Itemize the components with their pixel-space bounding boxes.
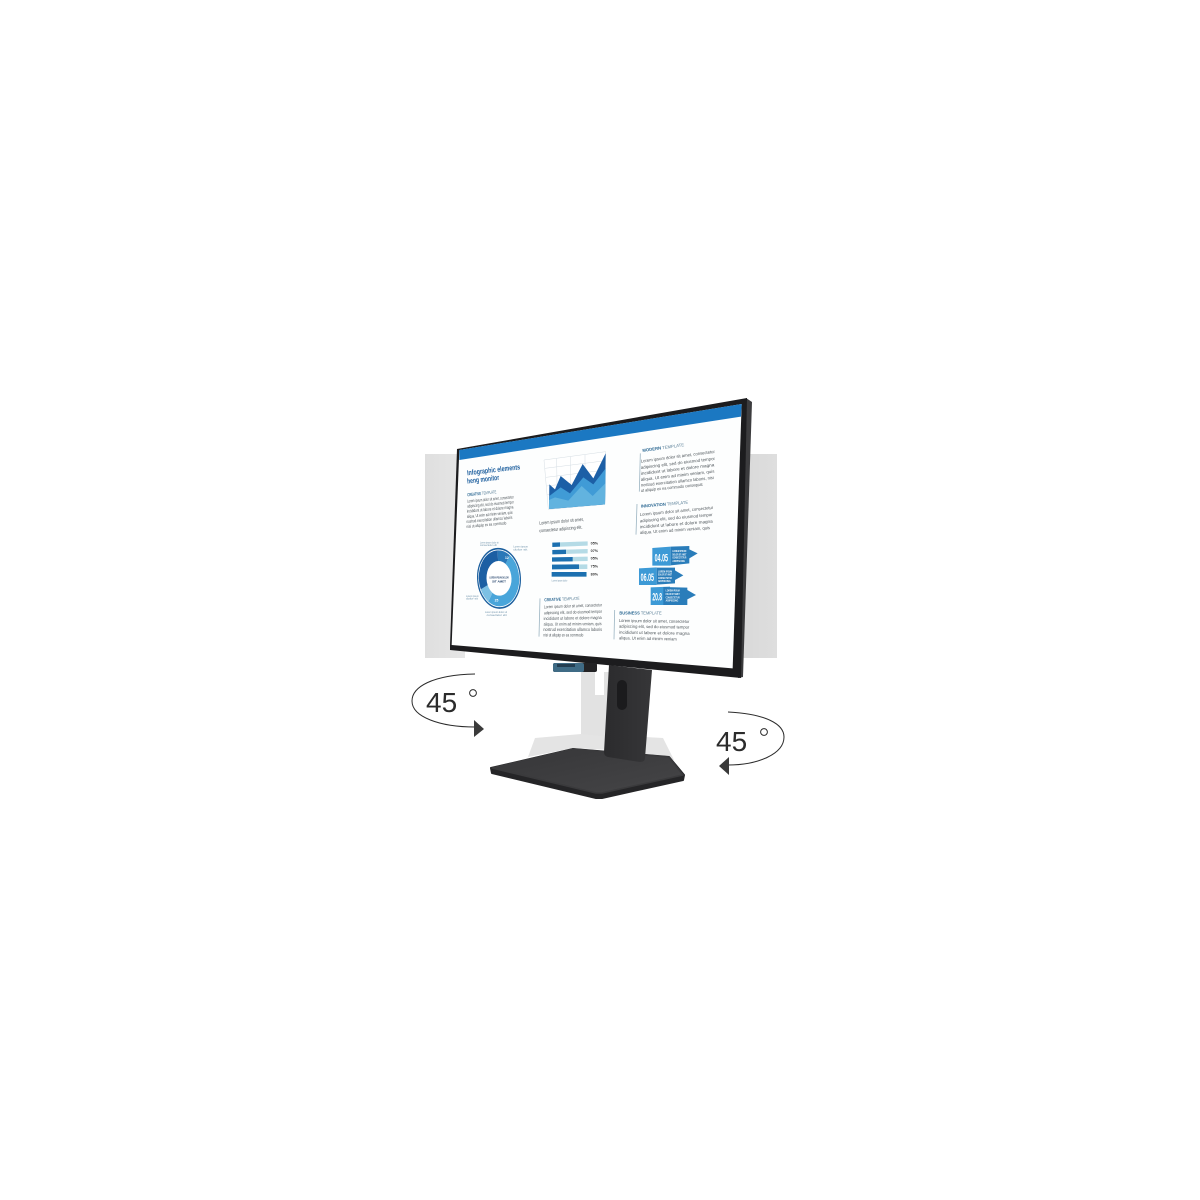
ribbon callout 20.8 — [651, 587, 696, 605]
donut callout labels: consectetur elit — [480, 543, 497, 547]
creative template text, left: aliqua. Ut enim ad minim veniam, quis — [467, 510, 513, 519]
monitor bezel — [450, 398, 747, 678]
ribbon callout 04.05: CONSECTETUR — [672, 558, 687, 560]
business template text — [614, 610, 690, 642]
creative template text, left: CREATIVE TEMPLATE — [467, 489, 497, 497]
creative template text, left: adipiscing elit, sed do eiusmod tempor — [467, 499, 514, 509]
donut chart: 25 — [495, 598, 499, 602]
screen header bar — [459, 404, 742, 460]
modern template text: MODERN TEMPLATE — [642, 442, 684, 453]
creative template text, left: nostrud exercitation ullamco laboris — [466, 515, 513, 524]
ribbon callout 04.05: 04.05 — [655, 552, 668, 564]
horizontal bar chart: 05% — [591, 557, 599, 561]
creative template text, centre: incididunt ut labore et dolore magna — [544, 615, 602, 621]
creative template text, left: incididunt ut labore et dolore magna — [467, 504, 514, 514]
donut callout labels: Lorem ipsum — [513, 545, 529, 549]
screen — [452, 404, 742, 668]
monitor — [450, 398, 752, 678]
right 45 label: 45 — [716, 726, 747, 757]
modern template text: ut aliquip ex ea commodo consequat — [641, 482, 703, 493]
ghost: rotated stand behind — [528, 672, 674, 760]
modern template text: aliqua. Ut enim ad minim veniam, quis — [641, 469, 715, 482]
creative template text, left: Lorem ipsum dolor sit amet, consectetur — [467, 494, 514, 504]
donut chart: LOREM IPSUM DOLOR — [489, 576, 509, 580]
business template text: adipiscing elit, sed do eiusmod tempor — [619, 624, 690, 630]
donut chart — [466, 540, 529, 617]
ribbon callout 20.8: LOREM IPSUM — [666, 591, 680, 593]
screen content — [466, 442, 716, 642]
chart caption: consectetur adipiscing elit. — [539, 525, 583, 533]
screen title: heng monitor — [466, 473, 500, 486]
right swivel indicator: 45 degrees — [716, 712, 784, 775]
left degree mark — [470, 690, 476, 696]
ribbon callout 06.05: ADIPISCING — [658, 580, 671, 583]
creative template text, centre: nostrud exercitation ullamco laboris — [543, 627, 602, 632]
ribbon callout 20.8: 20.8 — [652, 592, 662, 604]
innovation template text: adipiscing elit, sed do eiusmod tempor — [640, 512, 713, 523]
ribbon callout 20.8: ADIPISCING — [666, 600, 678, 603]
screen title: Infographic elements — [467, 462, 521, 477]
ribbon callout 04.05: ADIPISCING — [672, 560, 685, 563]
left 45 label: 45 — [426, 687, 457, 718]
modern template text: adipiscing elit, sed do eiusmod tempor — [641, 456, 716, 470]
right degree mark — [761, 729, 767, 735]
left arrow head — [474, 720, 484, 737]
ribbon callout 06.05: CONSECTETUR — [658, 578, 672, 580]
innovation template text: incididunt ut labore et dolore magna — [640, 519, 713, 529]
cable hole — [617, 680, 627, 710]
area chart — [544, 452, 606, 509]
donut callout labels: consectetur elit — [487, 613, 507, 617]
modern template text — [639, 442, 716, 493]
innovation template text: INNOVATION TEMPLATE — [641, 500, 688, 509]
business template text: incididunt ut labore et dolore magna — [619, 630, 690, 636]
donut chart: 12 — [505, 556, 509, 560]
ribbon callout 06.05: DOLOR SIT AMET — [658, 574, 672, 577]
creative template text, centre: adipiscing elit, sed do eiusmod tempor — [544, 609, 602, 615]
horizontal bar chart: 05% — [591, 541, 599, 545]
creative template text, centre — [539, 596, 602, 637]
innovation template text: Lorem ipsum dolor sit amet, consectetur — [640, 505, 714, 517]
ribbon callout 04.05: DOLOR SIT AMET — [672, 553, 687, 556]
creative template text, left — [466, 489, 514, 529]
horizontal bar chart — [552, 541, 599, 583]
horizontal bar chart: 80% — [591, 573, 599, 577]
right arrow head — [719, 757, 729, 775]
monitor stand base — [491, 749, 684, 798]
webcam clip under bezel — [553, 663, 597, 672]
ribbon callout 04.05 — [652, 546, 698, 566]
creative template text, centre: aliqua. Ut enim ad minim veniam, quis — [544, 621, 602, 627]
creative template text, centre: Lorem ipsum dolor sit amet, consectetur — [544, 602, 602, 609]
creative template text, centre: nisi ut aliquip ex ea commodo — [543, 632, 584, 637]
donut callout labels: Lorem ipsum dolor sit — [485, 610, 507, 614]
right rotation arc — [728, 712, 784, 765]
modern template text: Lorem ipsum dolor sit amet, consectetur — [640, 449, 716, 464]
donut callout labels: Lorem ipsum dolor sit — [480, 540, 499, 544]
donut callout labels: dolor sit — [513, 548, 528, 552]
modern template text: incididunt ut labore et dolore magna — [641, 462, 715, 476]
ribbon callout 20.8: CONSECTETUR — [666, 597, 680, 599]
ribbon callout 20.8: DOLOR SIT AMET — [666, 593, 680, 596]
monitor stand neck — [604, 665, 652, 762]
ribbon callout 06.05: 06.05 — [641, 572, 654, 584]
chart caption: Lorem ipsum dolor sit amet, — [539, 517, 584, 526]
creative template text, centre: CREATIVE TEMPLATE — [544, 596, 580, 602]
modern template text: nostrud exercitation ullamco laboris, nisi — [641, 475, 714, 488]
creative template text, left: nisi ut aliquip ex ea commodo — [466, 520, 507, 529]
horizontal bar chart: 07% — [591, 549, 599, 553]
ribbon callout 06.05: LOREM IPSUM — [658, 571, 672, 573]
screen title — [466, 462, 521, 486]
donut callout labels: dolor sit — [466, 597, 478, 601]
horizontal bar chart: Lorem ipsum dolor — [552, 579, 567, 583]
innovation template text: aliqua. Ut enim ad minim veniam, quis — [640, 525, 710, 535]
ribbon callout 06.05 — [639, 567, 683, 585]
donut chart: SIT AMET — [492, 580, 506, 584]
business template text: BUSINESS TEMPLATE — [619, 610, 662, 615]
business template text: Lorem ipsum dolor sit amet, consectetur — [619, 618, 690, 624]
ribbon callout 04.05: LOREM IPSUM — [672, 551, 686, 553]
innovation template text — [636, 500, 714, 535]
left swivel indicator: 45 degrees — [412, 674, 484, 737]
chart caption — [539, 517, 584, 533]
donut callout labels: Lorem ipsum — [466, 594, 479, 598]
business template text: aliqua. Ut enim ad minim veniam — [619, 635, 677, 642]
horizontal bar chart: 75% — [591, 564, 599, 568]
monitor side edge — [738, 398, 752, 678]
ghost: rotated monitor panels behind — [425, 454, 777, 658]
left rotation arc — [412, 674, 475, 727]
donut callout labels — [466, 540, 529, 617]
